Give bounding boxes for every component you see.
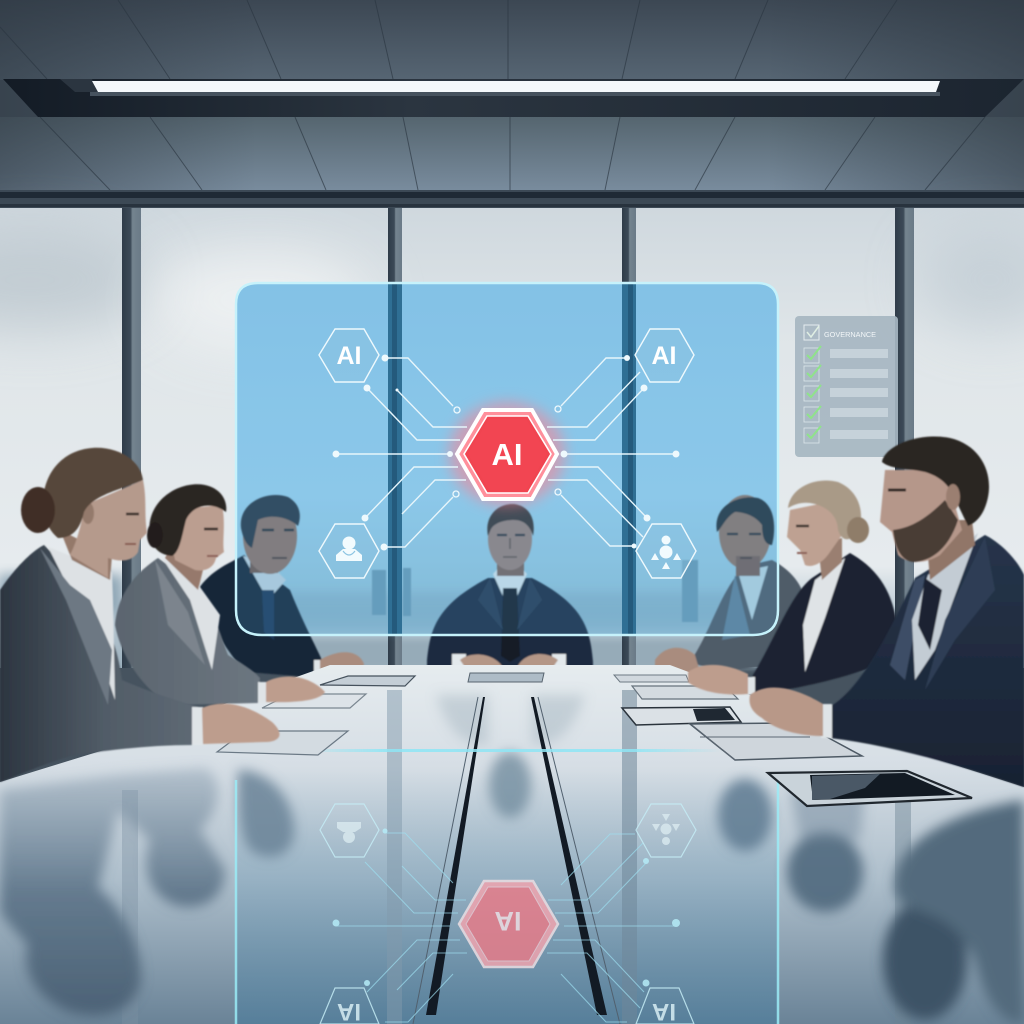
AI hexagon top left: AI <box>336 342 362 370</box>
person: central man <box>427 504 593 674</box>
ceiling light fixture <box>3 79 1024 117</box>
person: man back left, through hologram <box>198 495 364 678</box>
person: blonde woman right <box>688 480 898 695</box>
ceiling <box>0 0 1024 193</box>
governance checklist panel <box>795 316 898 457</box>
person icon hexagon bottom left <box>319 524 379 578</box>
documents and tablets on table <box>217 673 972 806</box>
person: second woman left <box>115 484 325 705</box>
reflected AI hexagon left <box>320 988 379 1024</box>
central AI hexagon <box>457 410 557 499</box>
reflected network icon hexagon <box>636 804 696 857</box>
table surface <box>0 665 1024 1024</box>
red glow <box>449 402 565 506</box>
network icon hexagon bottom right <box>636 524 696 578</box>
reflected person icon hexagon <box>320 804 379 857</box>
AI hexagon top left <box>319 329 379 382</box>
person: bearded man right <box>750 437 1024 787</box>
circuit lines <box>336 358 676 547</box>
hologram reflection on table <box>236 749 778 1024</box>
hologram panel background <box>236 283 778 635</box>
reflected central hexagon: AI <box>494 906 522 936</box>
central table channels <box>413 697 620 1024</box>
reflected AI hexagon right <box>636 988 694 1024</box>
window mullions seen through hologram <box>388 284 636 635</box>
checklist title: GOVERNANCE <box>824 330 876 339</box>
AI hexagon top right <box>635 329 694 382</box>
hologram tint over seated figures <box>236 283 778 635</box>
person: woman back right, through hologram <box>655 495 806 677</box>
person: far left woman <box>0 448 279 782</box>
AI hexagon top right: AI <box>652 342 676 370</box>
hologram circuitry and icons <box>236 283 778 635</box>
central AI hexagon: AI <box>492 437 522 472</box>
table reflections of people <box>0 695 1024 1024</box>
window view: sky and city <box>0 208 1024 668</box>
window frames <box>0 190 1024 668</box>
reflected central hexagon <box>459 881 558 967</box>
